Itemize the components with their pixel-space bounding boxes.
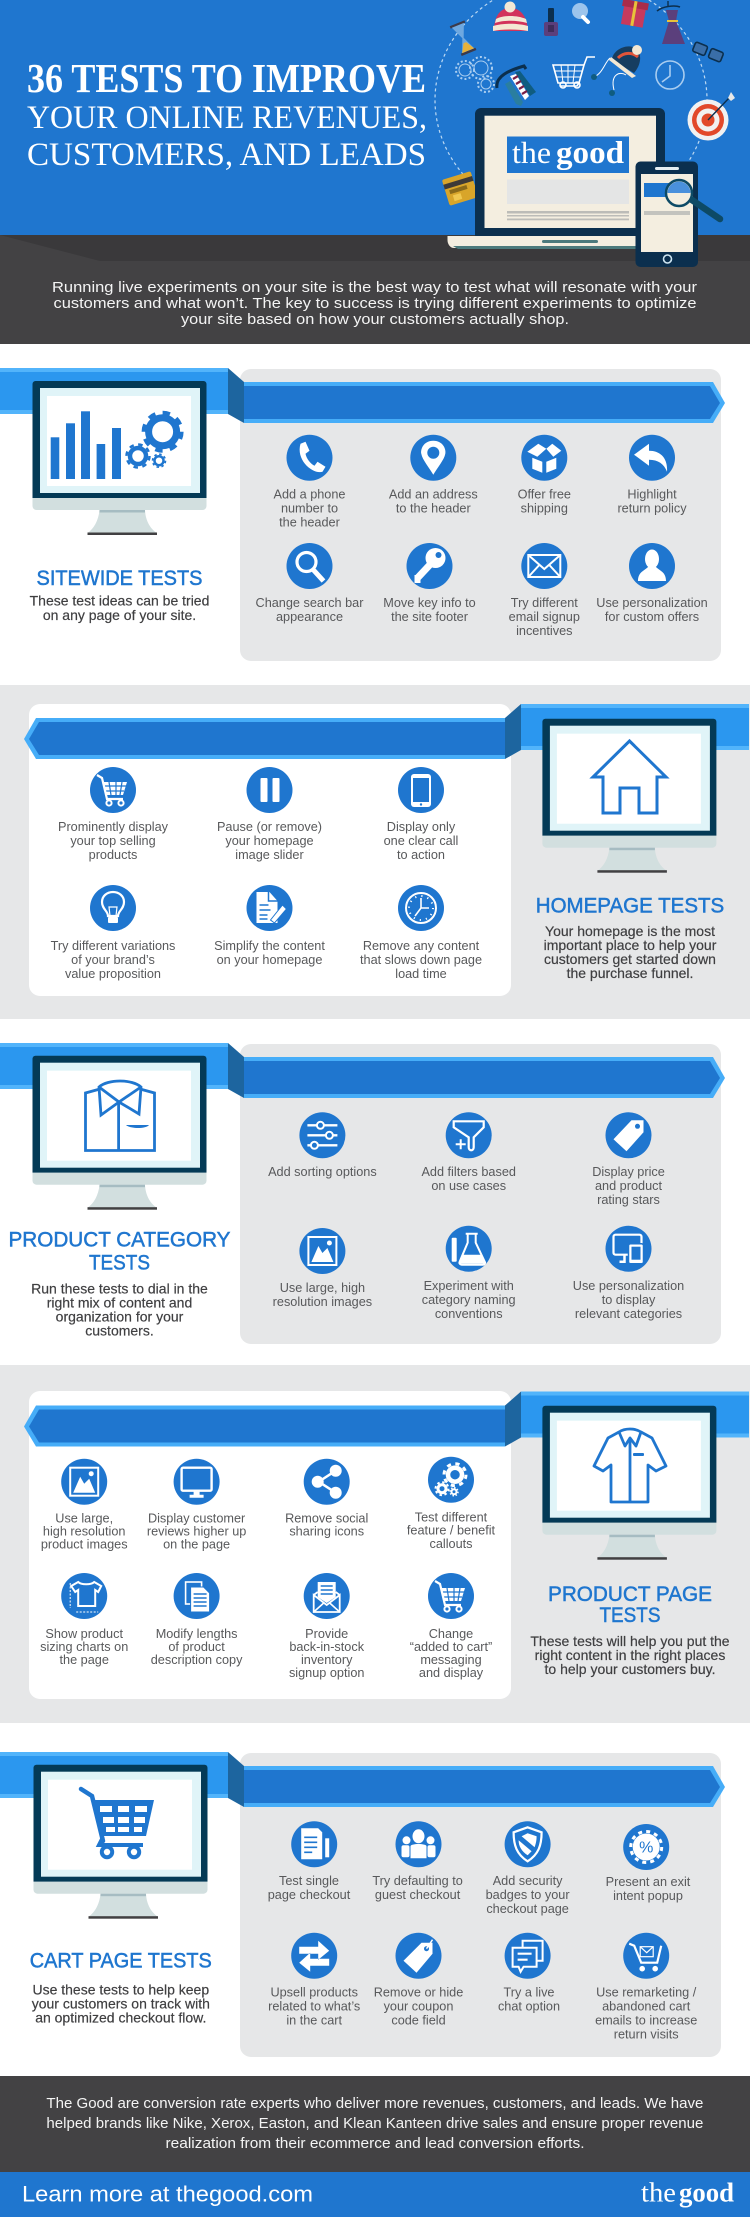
heading: HOMEPAGE TESTS — [536, 895, 724, 918]
test: return policy — [617, 435, 687, 516]
label: return visits — [614, 2028, 679, 2042]
illustration: dashed orbit with ecommerce items — [435, 0, 735, 222]
label: number to — [281, 502, 338, 516]
label: description copy — [151, 1653, 243, 1667]
label: Use personalization — [596, 596, 708, 610]
test: sorting — [268, 1112, 377, 1179]
icon: share — [304, 1459, 350, 1505]
label: Present an exit — [606, 1875, 691, 1889]
label: Use large, high — [280, 1281, 365, 1295]
icon: flask — [446, 1226, 492, 1272]
label — [595, 1986, 697, 2042]
icon: form and pen — [291, 1821, 337, 1867]
label — [372, 1874, 463, 1902]
heading: PRODUCT PAGE — [548, 1583, 712, 1606]
label: load time — [395, 967, 447, 981]
label: related to what’s — [268, 2000, 360, 2014]
description: Use these tests to help keep — [32, 1982, 209, 1998]
phone — [636, 162, 698, 267]
icon: swap arrows — [291, 1933, 337, 1979]
label — [592, 1165, 665, 1207]
label: Modify lengths — [156, 1627, 238, 1641]
icon: cart with envelope — [623, 1933, 669, 1979]
label: image slider — [235, 848, 304, 862]
icon: image — [299, 1228, 345, 1274]
icon: coupon tag — [396, 1933, 442, 1979]
label: abandoned cart — [602, 2000, 691, 2014]
label — [518, 488, 571, 516]
label: the page — [60, 1653, 109, 1667]
label: Move key info to — [383, 596, 476, 610]
label — [285, 1512, 368, 1538]
icon: dress — [657, 1, 685, 44]
monitor: charts and gears — [32, 381, 206, 535]
test: load time — [360, 885, 482, 981]
monitor: folded shirt — [32, 1056, 206, 1210]
test: sharing — [285, 1459, 368, 1538]
label: Upsell products — [270, 1986, 358, 2000]
label: Display only — [387, 820, 456, 834]
label: relevant categories — [575, 1307, 682, 1321]
icon: box — [521, 435, 567, 481]
test: single page checkout — [268, 1821, 351, 1902]
label — [40, 1627, 128, 1667]
label: value proposition — [65, 967, 161, 981]
panel: cart page tests section — [0, 1723, 750, 2076]
label: your homepage — [225, 834, 314, 848]
label: code field — [391, 2014, 446, 2028]
ribbon — [24, 1392, 749, 1446]
icon: lightbulb — [572, 3, 588, 22]
label: Provide — [305, 1627, 348, 1641]
icon: target with dart — [688, 92, 735, 140]
label: Use remarketing / — [596, 1986, 697, 2000]
logo: the — [641, 2178, 676, 2208]
label: appearance — [276, 610, 343, 624]
label — [486, 1874, 570, 1916]
label: on your homepage — [217, 953, 322, 967]
description: right content in the right places — [535, 1647, 725, 1663]
title — [27, 55, 427, 173]
label — [509, 596, 580, 638]
description: on any page of your site. — [43, 607, 196, 623]
icon: cart — [90, 767, 136, 813]
label: back-in-stock — [289, 1640, 365, 1654]
test: personalized categories — [573, 1226, 684, 1321]
description: the purchase funnel. — [567, 965, 693, 981]
label: Add filters based — [421, 1165, 516, 1179]
footer: about text: helped brands like Nike, Xerox, Easton, and Klean Kanteen drive sales and ensure proper revenue — [46, 2116, 703, 2132]
test: slider — [217, 767, 322, 862]
icon: clock — [656, 61, 684, 89]
label: Try different — [511, 596, 578, 610]
label: sharing icons — [289, 1524, 364, 1538]
label: products — [89, 848, 137, 862]
label — [360, 939, 482, 981]
intro text: customers and what won’t. The key to success is trying different experiments to optimize — [54, 296, 696, 312]
label — [51, 939, 175, 981]
laptop: good — [556, 134, 624, 170]
label: inventory — [301, 1653, 353, 1667]
icon: person — [629, 543, 675, 589]
heading: TESTS — [89, 1251, 150, 1274]
test: filters — [421, 1112, 516, 1193]
test: reviews — [147, 1459, 246, 1552]
icon: red beanie — [493, 2, 528, 31]
label: to action — [397, 848, 445, 862]
label: conventions — [435, 1307, 503, 1321]
monitor: house — [542, 719, 716, 873]
description — [530, 1633, 730, 1677]
ribbon — [0, 1752, 725, 1807]
description — [544, 923, 717, 981]
description: an optimized checkout flow. — [35, 2010, 206, 2026]
title: 36 TESTS TO IMPROVE — [27, 55, 426, 101]
label: page checkout — [268, 1888, 351, 1902]
icon: percent badge: % — [639, 1840, 653, 1856]
label — [268, 1874, 351, 1902]
label — [389, 488, 478, 516]
label: guest checkout — [375, 1888, 461, 1902]
label — [268, 1986, 360, 2028]
test: coupon code — [374, 1933, 463, 2028]
logo: good — [679, 2177, 734, 2208]
illustration: laptop and phone — [448, 108, 720, 267]
label: Add sorting options — [268, 1165, 377, 1179]
test: phone number — [274, 435, 345, 530]
test: address — [389, 435, 478, 516]
label: on the page — [163, 1538, 230, 1552]
label: of product — [168, 1640, 225, 1654]
label: Remove or hide — [374, 1986, 463, 2000]
test: added to cart — [410, 1573, 492, 1680]
heading: CART PAGE TESTS — [30, 1950, 212, 1973]
label: Highlight — [627, 488, 677, 502]
description: organization for your — [56, 1308, 184, 1324]
label — [41, 1512, 128, 1552]
label — [407, 1510, 496, 1551]
panel: homepage tests section — [0, 685, 750, 1019]
label: Try a live — [504, 1986, 554, 2000]
label: incentives — [516, 624, 573, 638]
label: Try different variations — [51, 939, 175, 953]
label — [422, 1279, 516, 1321]
label: Use personalization — [573, 1279, 684, 1293]
test: back in stock — [289, 1573, 365, 1680]
icon: gift — [619, 0, 649, 28]
icon: key — [406, 543, 452, 589]
icon: cart — [428, 1573, 474, 1619]
test: search bar — [256, 543, 364, 624]
header background — [0, 0, 750, 344]
description: These tests will help you put the — [530, 1633, 730, 1649]
icon: clock — [398, 885, 444, 931]
ribbon — [0, 1043, 725, 1098]
label: reviews higher up — [147, 1524, 246, 1538]
icon: map pin — [410, 435, 456, 481]
description: to help your customers buy. — [545, 1661, 715, 1677]
panel: product page tests section — [0, 1365, 750, 1723]
icon: glasses — [692, 42, 724, 62]
panel: sitewide tests section — [0, 344, 750, 685]
test: large images — [273, 1228, 372, 1309]
label: Display price — [592, 1165, 665, 1179]
icon: documents — [174, 1573, 220, 1619]
label: Add a phone — [274, 488, 345, 502]
heading: TESTS — [600, 1604, 660, 1627]
intro text: your site based on how your customers actually shop. — [181, 312, 569, 328]
description — [30, 592, 209, 623]
monitor: cart — [34, 1765, 208, 1919]
label: Try defaulting to — [372, 1874, 463, 1888]
label: “added to cart” — [410, 1640, 492, 1654]
test: simplify content — [214, 885, 325, 967]
icon: magnifier — [286, 543, 332, 589]
icon: return arrow — [629, 435, 675, 481]
label — [617, 488, 687, 516]
heading: SITEWIDE TESTS — [36, 567, 202, 590]
description: Your homepage is the most — [545, 923, 715, 939]
magnifier — [666, 180, 720, 219]
title: YOUR ONLINE REVENUES, — [27, 100, 427, 136]
icon: nail polish — [544, 8, 558, 36]
label — [596, 596, 708, 624]
label: sizing charts on — [40, 1640, 128, 1654]
test: free shipping — [518, 435, 571, 516]
test: remarketing — [595, 1933, 697, 2042]
icon: t-shirt with measures — [61, 1573, 107, 1619]
label — [58, 820, 169, 862]
test: exit popup — [606, 1824, 691, 1903]
description: customers get started down — [544, 951, 716, 967]
label: high resolution — [43, 1524, 125, 1538]
label: Add an address — [389, 488, 478, 502]
icon: image — [61, 1459, 107, 1505]
label: Change — [429, 1627, 473, 1641]
label: rating stars — [597, 1193, 660, 1207]
label — [498, 1986, 560, 2014]
description: important place to help your — [544, 937, 717, 953]
label: to the header — [396, 502, 471, 516]
label — [606, 1875, 691, 1903]
label: Remove any content — [363, 939, 480, 953]
label: Display customer — [148, 1512, 246, 1526]
test: price and rating — [592, 1112, 665, 1207]
label — [289, 1627, 365, 1680]
label — [573, 1279, 684, 1321]
label — [383, 596, 476, 624]
label: shipping — [521, 502, 568, 516]
label: Show product — [45, 1627, 123, 1641]
label: Add security — [493, 1874, 563, 1888]
label: on use cases — [431, 1179, 506, 1193]
logo — [641, 2177, 734, 2208]
icon: devices — [606, 1226, 652, 1272]
icon: shield — [505, 1821, 551, 1867]
label — [256, 596, 364, 624]
label: in the cart — [286, 2014, 343, 2028]
test: callouts — [407, 1457, 496, 1551]
icon: funnel — [446, 1112, 492, 1158]
test: security badges — [486, 1821, 570, 1916]
icon: smartphone — [398, 767, 444, 813]
label: messaging — [420, 1653, 482, 1667]
label: Change search bar — [256, 596, 364, 610]
label — [217, 820, 322, 862]
heading — [8, 1229, 230, 1274]
label: badges to your — [486, 1888, 570, 1902]
link text: Learn more at thegood.com — [22, 2182, 313, 2207]
label: of your brand’s — [71, 953, 155, 967]
label: product images — [41, 1538, 128, 1552]
label — [384, 820, 458, 862]
label: Remove social — [285, 1512, 368, 1526]
label — [214, 939, 325, 967]
icon: envelope — [521, 543, 567, 589]
label: intent popup — [613, 1889, 683, 1903]
test: email signup — [509, 543, 580, 638]
icon: pause — [246, 767, 292, 813]
label — [421, 1165, 516, 1193]
label — [274, 488, 345, 530]
label: your coupon — [384, 2000, 453, 2014]
label: feature / benefit — [407, 1524, 496, 1538]
test: value proposition — [51, 885, 175, 981]
title: CUSTOMERS, AND LEADS — [27, 137, 426, 173]
icon: hat with cords — [591, 45, 642, 96]
footer: about text: realization from their ecommerce and lead conversion efforts. — [166, 2136, 584, 2152]
label: one clear call — [384, 834, 458, 848]
footer: about text: The Good are conversion rate experts who deliver more revenues, customers, and leads. We have — [46, 2096, 703, 2112]
label — [273, 1281, 372, 1309]
icon: chat bubbles — [505, 1933, 551, 1979]
icon: credit card — [442, 171, 478, 206]
icon: group of people — [396, 1821, 442, 1867]
label: the header — [279, 516, 341, 530]
label: chat option — [498, 2000, 560, 2014]
label — [151, 1627, 243, 1667]
label: email signup — [509, 610, 580, 624]
icon: open envelope — [304, 1573, 350, 1619]
icon: hourglass — [450, 20, 476, 56]
test: call to action — [384, 767, 458, 862]
description — [31, 1280, 208, 1338]
test: sizing charts — [40, 1573, 128, 1667]
label: resolution images — [273, 1295, 372, 1309]
label: the site footer — [391, 610, 469, 624]
description: Run these tests to dial in the — [31, 1280, 208, 1296]
test: top products — [58, 767, 169, 862]
heading: PRODUCT CATEGORY — [8, 1229, 230, 1252]
label: your top selling — [70, 834, 156, 848]
label: category naming — [422, 1293, 516, 1307]
description: right mix of content and — [47, 1294, 192, 1310]
test: description length — [151, 1573, 243, 1667]
label: Use large, — [55, 1512, 113, 1526]
icon: bulb — [90, 885, 136, 931]
label: Test different — [415, 1510, 488, 1524]
icon: phone — [286, 435, 332, 481]
monitor: polo shirt — [542, 1406, 716, 1560]
label: to display — [602, 1293, 656, 1307]
label: Experiment with — [424, 1279, 514, 1293]
footer: about text — [0, 2076, 750, 2172]
label: callouts — [429, 1537, 473, 1551]
footer: call to action bar — [0, 2172, 750, 2217]
intro text — [52, 280, 697, 328]
description: These test ideas can be tried — [30, 592, 209, 608]
test: live chat — [498, 1933, 560, 2014]
label: and product — [595, 1179, 662, 1193]
label: and display — [419, 1666, 484, 1680]
test: guest checkout — [372, 1821, 463, 1902]
label — [147, 1512, 246, 1552]
laptop — [448, 108, 665, 249]
label: emails to increase — [595, 2014, 697, 2028]
intro text: Running live experiments on your site is the best way to test what will resonate with your — [52, 280, 697, 296]
label: checkout page — [486, 1902, 569, 1916]
laptop: the — [512, 135, 551, 170]
test: upsell — [268, 1933, 360, 2028]
label: that slows down page — [360, 953, 482, 967]
icon: gears — [428, 1457, 474, 1503]
label: return policy — [617, 502, 687, 516]
label: Simplify the content — [214, 939, 325, 953]
icon: monitor — [174, 1459, 220, 1505]
description: your customers on track with — [32, 1996, 210, 2012]
test: product images — [41, 1459, 128, 1552]
heading — [548, 1583, 712, 1627]
ribbon — [24, 704, 749, 759]
label: Offer free — [518, 488, 571, 502]
label — [410, 1627, 492, 1680]
test: naming — [422, 1226, 516, 1321]
label: Prominently display — [58, 820, 169, 834]
label: Test single — [279, 1874, 339, 1888]
icon: price tag — [606, 1112, 652, 1158]
label: for custom offers — [605, 610, 699, 624]
icon: ties on hanger — [497, 66, 536, 106]
description — [32, 1982, 210, 2026]
icon: white cart — [553, 57, 595, 88]
label: Pause (or remove) — [217, 820, 322, 834]
description: customers. — [85, 1322, 154, 1338]
label: signup option — [289, 1666, 364, 1680]
test: personalization — [596, 543, 708, 624]
ribbon — [0, 368, 725, 423]
icon: sliders — [299, 1112, 345, 1158]
label — [374, 1986, 463, 2028]
icon: document and pencil — [246, 885, 292, 931]
icon: outline gears — [456, 57, 494, 92]
test: key info — [383, 543, 476, 624]
panel: product category tests section — [0, 1019, 750, 1365]
